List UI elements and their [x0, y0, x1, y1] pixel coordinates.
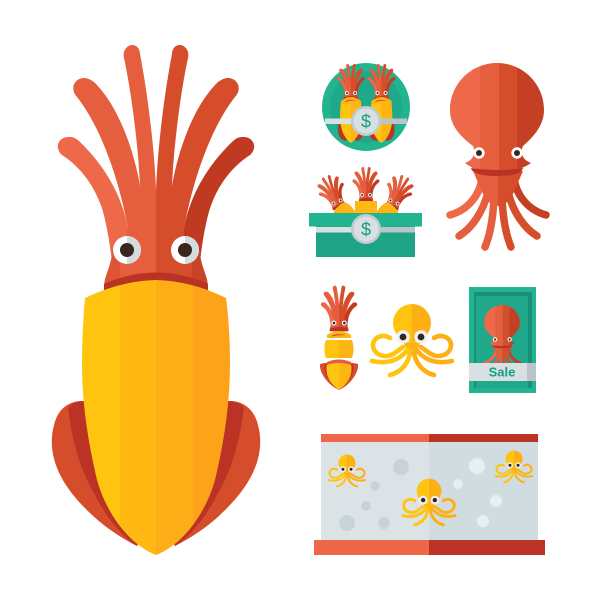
tank octopus left: [329, 453, 365, 486]
yellow octopus: [372, 300, 452, 375]
box of three squids: [309, 167, 422, 257]
tank octopus center: [403, 476, 455, 525]
tank base: [314, 540, 429, 555]
large squid: [52, 45, 260, 560]
large red octopus: [445, 60, 547, 247]
tank glass: [321, 442, 429, 540]
squid fins: [52, 401, 260, 546]
squid head and tentacles: [58, 45, 254, 300]
sale label: Sale: [489, 364, 515, 380]
bubbles: [339, 458, 502, 531]
aquarium tank: [314, 434, 545, 555]
small segmented squid: [320, 286, 358, 390]
sale poster: [469, 287, 536, 393]
squid mantle: [82, 280, 230, 555]
tank lid: [321, 434, 429, 442]
tank octopus right: [496, 449, 532, 482]
badge: two squids with price coin: [322, 63, 410, 151]
